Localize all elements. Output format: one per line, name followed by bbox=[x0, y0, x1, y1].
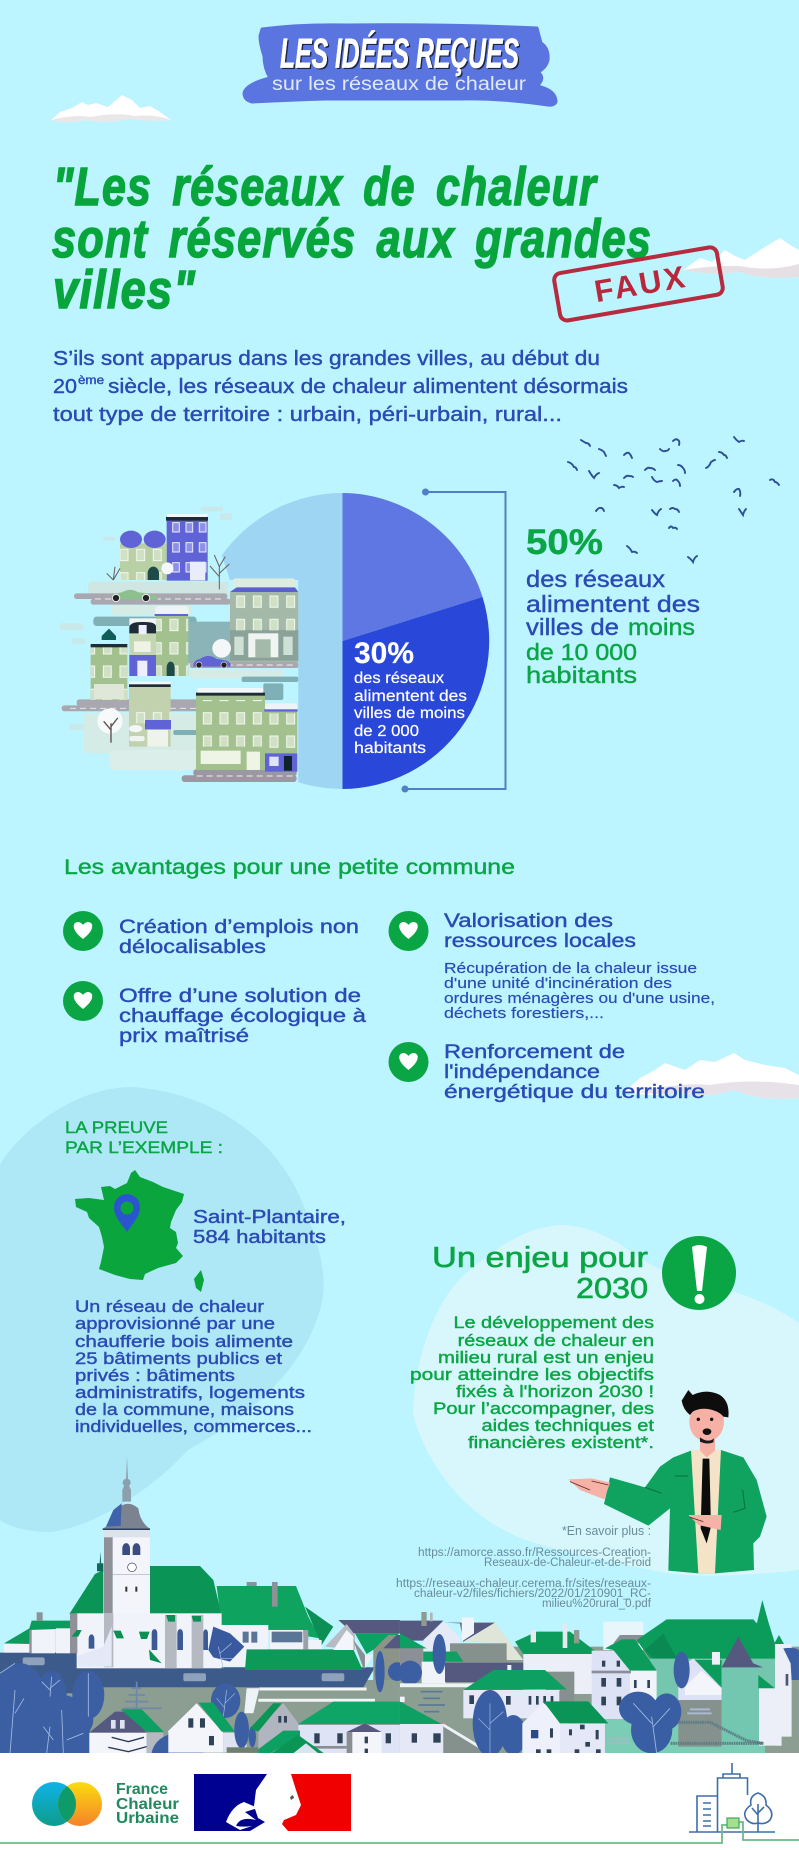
house A bbox=[89, 1733, 147, 1753]
cloud: right of title bbox=[683, 238, 799, 278]
teal castle bbox=[650, 1658, 775, 1717]
house D bbox=[298, 1725, 400, 1753]
jacket bbox=[604, 1450, 767, 1573]
stamp: FAUX: FAUX bbox=[592, 259, 688, 309]
text: énergétique du territoire bbox=[444, 1082, 705, 1103]
header banner bbox=[244, 25, 556, 105]
panel: 2030 blob bbox=[413, 1225, 799, 1576]
example description: Un réseau de chaleur bbox=[75, 1298, 265, 1316]
left roofs bbox=[400, 1621, 443, 1641]
intro paragraph: siècle, les réseaux de chaleur alimentent désormais bbox=[108, 376, 628, 398]
centre building bbox=[592, 1651, 631, 1719]
main title bbox=[52, 157, 652, 320]
car green bbox=[112, 590, 158, 600]
text: l'indépendance bbox=[444, 1062, 600, 1083]
Corsica bbox=[194, 1270, 204, 1292]
heat pipe bbox=[0, 1822, 799, 1843]
detail text: ordures ménagères ou d'une usine, bbox=[444, 991, 715, 1007]
advantage: local resources bbox=[388, 911, 715, 1022]
main title: villes" bbox=[53, 260, 196, 320]
big blue tree bbox=[619, 1692, 681, 1753]
mid buildings bbox=[156, 615, 188, 676]
church tower bbox=[113, 1537, 150, 1614]
text: ressources locales bbox=[444, 931, 636, 952]
example description: approvisionné par une bbox=[75, 1315, 275, 1333]
30% label: des réseaux bbox=[354, 670, 444, 687]
blue shrub bbox=[152, 1733, 203, 1753]
30% label: 30% bbox=[354, 637, 414, 670]
pie slice: remaining 50% bbox=[194, 493, 342, 789]
neck bbox=[700, 1437, 715, 1457]
hillside bbox=[0, 1680, 400, 1753]
pie slice: 20% bbox=[342, 493, 482, 641]
detail text: Récupération de la chaleur issue bbox=[444, 961, 697, 977]
heading: 2030: 2030 bbox=[576, 1273, 648, 1305]
white tree bbox=[97, 708, 123, 734]
town name: 584 habitants bbox=[193, 1227, 326, 1247]
advantage: ecological heating bbox=[63, 981, 367, 1047]
hands bbox=[568, 1478, 610, 1499]
example description: chaufferie bois alimente bbox=[75, 1333, 293, 1351]
icon: heart bbox=[63, 981, 103, 1021]
text bbox=[119, 986, 367, 1047]
intro paragraph: S’ils sont apparus dans les grandes villes, au début du bbox=[53, 348, 600, 370]
town name bbox=[193, 1207, 346, 1247]
house C bbox=[258, 1703, 298, 1752]
text: Création d’emplois non bbox=[119, 917, 359, 938]
car blue and tree bbox=[212, 639, 231, 658]
stat: 50% bbox=[526, 523, 700, 688]
2030 paragraph: fixés à l'horizon 2030 ! bbox=[456, 1383, 654, 1401]
stat: 50%: moins bbox=[628, 614, 695, 640]
example description: administratifs, logements bbox=[75, 1384, 305, 1402]
banner shape bbox=[244, 25, 556, 105]
icon: heart bbox=[63, 911, 103, 951]
stat: 50%: habitants bbox=[526, 662, 637, 688]
icon: exclamation mark bbox=[662, 1236, 736, 1310]
sources: Reseaux-de-Chaleur-et-de-Froid bbox=[484, 1557, 651, 1569]
intro paragraph bbox=[53, 348, 628, 426]
hair bbox=[682, 1390, 729, 1417]
cover mask over pie bbox=[50, 517, 298, 790]
icon: location pin bbox=[114, 1194, 140, 1232]
sources bbox=[396, 1523, 652, 1610]
banner title bbox=[280, 30, 520, 78]
text bbox=[444, 1042, 705, 1103]
trees by house bbox=[473, 1690, 526, 1757]
text: prix maîtrisé bbox=[119, 1026, 249, 1047]
birds bbox=[568, 437, 779, 562]
stat: 50%: alimentent des bbox=[526, 591, 700, 617]
shirt bbox=[691, 1450, 721, 1573]
cloud: top left bbox=[51, 95, 171, 122]
2030 paragraph: aides techniques et bbox=[482, 1417, 654, 1435]
logo text: France bbox=[116, 1781, 168, 1798]
30% label: villes de moins bbox=[354, 705, 465, 722]
text: chauffage écologique à bbox=[119, 1006, 367, 1027]
text bbox=[444, 911, 636, 952]
large grey-green building bbox=[230, 592, 298, 662]
banner title: LES IDÉES REÇUES bbox=[282, 31, 520, 78]
radiator bbox=[727, 1818, 739, 1828]
icon: city and radiator bbox=[0, 1763, 799, 1843]
sources: https://amorce.asso.fr/Ressources-Creation- bbox=[418, 1547, 651, 1559]
tie bbox=[701, 1459, 711, 1543]
fir tree bbox=[123, 1682, 162, 1713]
tree on wall bbox=[208, 1627, 244, 1662]
trees bbox=[0, 1663, 117, 1756]
centre green house bbox=[463, 1690, 560, 1718]
icon: heart bbox=[388, 1042, 428, 1082]
heading: 2030 bbox=[432, 1242, 648, 1305]
intro paragraph: tout type de territoire : urbain, péri-urbain, rural... bbox=[53, 404, 562, 426]
stat: 50%: de 10 000 bbox=[526, 639, 637, 665]
heading: 2030: Un enjeu pour bbox=[432, 1242, 648, 1274]
big green building bbox=[196, 695, 265, 770]
roofs bbox=[150, 1566, 222, 1615]
example heading: PAR L’EXEMPLE : bbox=[65, 1138, 223, 1157]
text: Offre d’une solution de bbox=[119, 986, 361, 1007]
2030 paragraph: Pour l’accompagner, des bbox=[433, 1400, 654, 1418]
small right building bbox=[265, 712, 297, 753]
2030 paragraph: financières existent*. bbox=[468, 1434, 654, 1452]
snow mist bbox=[88, 582, 228, 598]
house B bbox=[168, 1703, 223, 1753]
advantages heading: Les avantages pour une petite commune bbox=[64, 856, 515, 879]
bare trees bbox=[107, 555, 229, 589]
detail text: d'une unité d'incinération des bbox=[444, 976, 672, 992]
advantage: independence bbox=[388, 1042, 705, 1103]
example heading bbox=[65, 1118, 223, 1157]
tower bbox=[722, 1667, 759, 1743]
illustration: village left bbox=[0, 1457, 407, 1756]
stat: 50%: villes de bbox=[526, 614, 619, 640]
intro paragraph: ème bbox=[78, 373, 104, 387]
stairs bbox=[670, 1722, 763, 1743]
logo: France Chaleur Urbaine bbox=[32, 1781, 179, 1827]
left green house bbox=[400, 1702, 442, 1724]
small white house bbox=[678, 1658, 722, 1700]
left building bbox=[91, 647, 127, 700]
lower green roof bbox=[245, 1649, 363, 1670]
illustration: village right bbox=[398, 1600, 799, 1757]
small green roofs bbox=[258, 1731, 300, 1753]
front white house bbox=[522, 1703, 567, 1753]
advantage: jobs bbox=[63, 911, 359, 958]
row one buildings bbox=[167, 520, 208, 581]
sources: *En savoir plus : bbox=[562, 1523, 651, 1538]
pie chart bbox=[194, 493, 489, 789]
30% label bbox=[354, 637, 467, 757]
bracket bbox=[402, 488, 506, 792]
2030 paragraph: milieu rural est un enjeu bbox=[438, 1349, 654, 1367]
logo text: Chaleur bbox=[116, 1796, 179, 1813]
logo circles bbox=[32, 1782, 102, 1826]
pie slice: 30% bbox=[342, 597, 489, 789]
stat: 50%: des réseaux bbox=[526, 566, 666, 592]
roads bbox=[62, 593, 298, 782]
text: Valorisation des bbox=[444, 911, 613, 932]
logo: Marianne bbox=[194, 1774, 351, 1831]
retaining wall bbox=[0, 1653, 375, 1693]
example description bbox=[75, 1298, 312, 1436]
right wing bbox=[222, 1625, 268, 1667]
cypresses bbox=[234, 1712, 249, 1748]
text: Renforcement de bbox=[444, 1042, 625, 1063]
30% label: de 2 000 bbox=[354, 723, 419, 740]
main title: "Les réseaux de chaleur bbox=[53, 157, 598, 217]
church body bbox=[77, 1613, 222, 1668]
banner subtitle: sur les réseaux de chaleur bbox=[272, 74, 527, 95]
illustration: snowy town bbox=[50, 507, 298, 790]
sources: milieu%20rural_0.pdf bbox=[542, 1598, 652, 1610]
sources: chaleur-v2/files/fichiers/2022/01/210901_RC- bbox=[414, 1588, 651, 1600]
30% label: alimentent des bbox=[354, 688, 467, 705]
cloud: right of advantages bbox=[624, 1053, 799, 1099]
buildings and tree outline bbox=[689, 1763, 775, 1832]
sources: https://reseaux-chaleur.cerema.fr/sites/reseaux- bbox=[396, 1578, 651, 1590]
logo text: Urbaine bbox=[116, 1810, 179, 1827]
main title: sont réservés aux grandes bbox=[52, 209, 652, 269]
terrace railings bbox=[258, 1689, 375, 1700]
text bbox=[119, 917, 359, 958]
stat: 50%: 50% bbox=[526, 523, 603, 562]
panel: example blob bbox=[0, 1087, 324, 1532]
illustration: man bbox=[568, 1390, 767, 1573]
lower mid building bbox=[129, 687, 171, 747]
example description: de la commune, maisons bbox=[75, 1401, 294, 1419]
stone patterns bbox=[23, 1657, 344, 1681]
example description: 25 bâtiments publics et bbox=[75, 1350, 283, 1368]
2030 paragraph: pour atteindre les objectifs bbox=[410, 1366, 654, 1384]
detail text: déchets forestiers,... bbox=[444, 1006, 604, 1022]
example description: privés : bâtiments bbox=[75, 1367, 235, 1385]
back green house bbox=[515, 1632, 599, 1654]
town name: Saint-Plantaire, bbox=[193, 1207, 346, 1227]
30% label: habitants bbox=[354, 740, 426, 757]
icon: heart bbox=[388, 911, 428, 951]
2030 paragraph bbox=[410, 1314, 654, 1452]
example heading: LA PREUVE bbox=[65, 1118, 168, 1137]
banner title: LES IDÉES REÇUES bbox=[280, 30, 519, 76]
neighbouring roofs bbox=[338, 1620, 400, 1633]
face bbox=[689, 1402, 724, 1442]
2030 paragraph: Le développement des bbox=[454, 1314, 654, 1332]
logo text bbox=[116, 1781, 179, 1827]
detail text bbox=[444, 961, 715, 1022]
intro paragraph: 20 bbox=[53, 376, 77, 398]
map: France bbox=[75, 1170, 204, 1292]
example description: individuelles, commerces... bbox=[75, 1418, 312, 1436]
stamp: FAUX bbox=[553, 246, 724, 322]
2030 paragraph: réseaux de chaleur en bbox=[458, 1332, 654, 1350]
back wall bbox=[400, 1647, 799, 1753]
chapel walls bbox=[32, 1630, 55, 1653]
footer band bbox=[0, 1753, 799, 1850]
text: délocalisables bbox=[119, 937, 266, 958]
